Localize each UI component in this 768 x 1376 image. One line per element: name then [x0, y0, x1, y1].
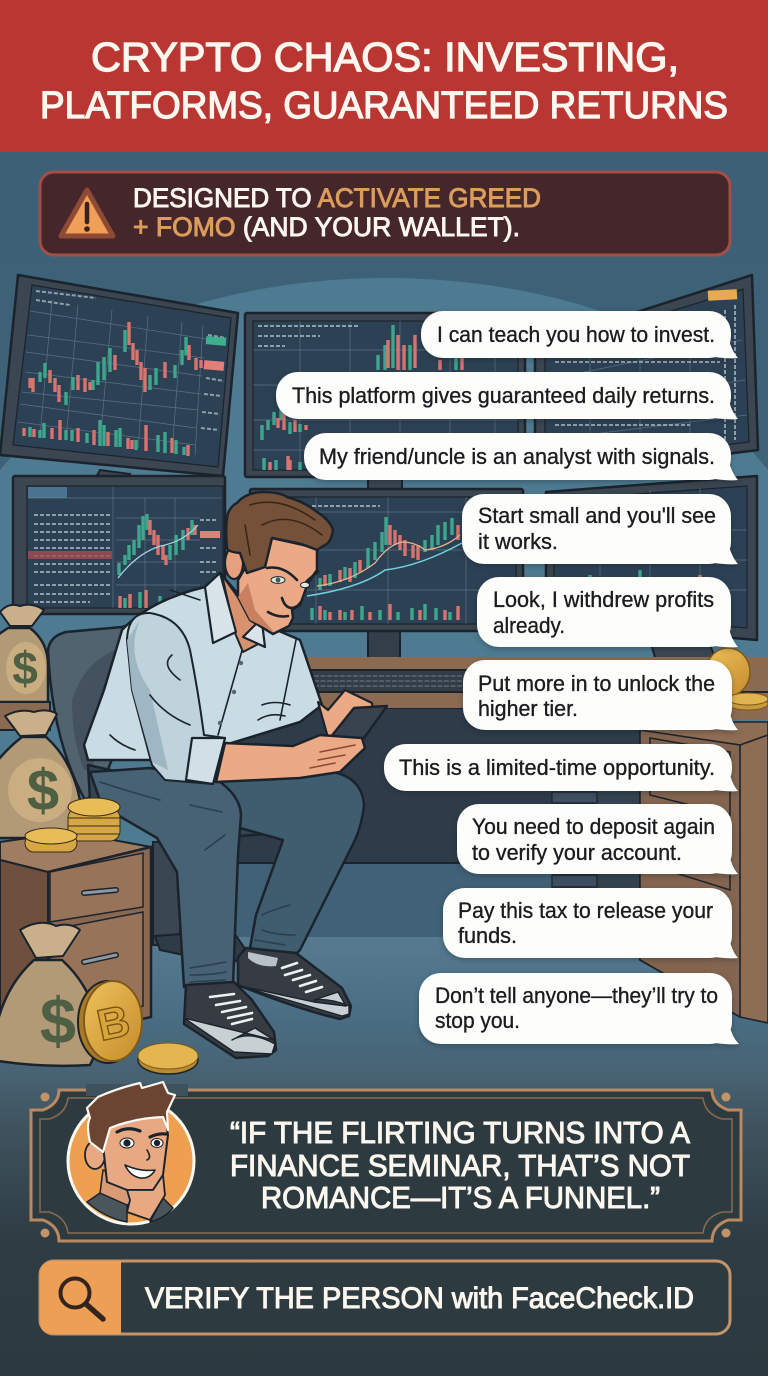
- verify text: VERIFY THE PERSON with FaceCheck.ID: [145, 1282, 694, 1315]
- portrait brows: [117, 1129, 166, 1137]
- bubble 6: higher tier.: [478, 696, 578, 721]
- bubble 8: [457, 804, 738, 874]
- far hand: [318, 690, 374, 745]
- money bag: middle: [0, 710, 80, 838]
- portrait hand: [127, 1175, 165, 1220]
- far shoe: [238, 948, 351, 1019]
- monitor: lower centre: [250, 489, 523, 668]
- drawers: right: [640, 648, 768, 1023]
- speech bubbles: [276, 311, 739, 1044]
- bubble 5: already.: [493, 613, 565, 638]
- man: [84, 492, 387, 1058]
- warning panel: [40, 172, 730, 255]
- bubble 3: My friend/uncle is an analyst with signals.: [319, 444, 715, 469]
- bubble 9: Pay this tax to release your: [458, 898, 713, 923]
- hair: [226, 492, 333, 573]
- ear: [225, 547, 243, 579]
- bubble 8: to verify your account.: [472, 840, 682, 865]
- portrait shirt: [87, 1193, 173, 1222]
- monitor: lower right: [546, 476, 757, 675]
- portrait ear: [85, 1141, 105, 1169]
- money bag: bottom: [0, 923, 102, 1066]
- monitor: top centre: [245, 313, 525, 494]
- quote panel: FINANCE SEMINAR, THAT’S NOT: [230, 1148, 690, 1183]
- background dome: [0, 278, 768, 863]
- coin: right: [706, 648, 750, 696]
- title line 2: PLATFORMS, GUARANTEED RETURNS: [40, 85, 728, 127]
- money bag: top: $: [12, 642, 38, 694]
- face: [238, 538, 317, 634]
- shirt: [84, 573, 322, 770]
- bubble 7: This is a limited-time opportunity.: [399, 755, 715, 780]
- background wall: [0, 150, 768, 940]
- drawer handles: [84, 890, 116, 962]
- coin stack: right: [728, 693, 768, 710]
- money bag: middle: $: [27, 758, 59, 823]
- footer background: [0, 1076, 768, 1376]
- coin stack: small: [25, 828, 77, 852]
- wall strip below desk: [0, 863, 768, 938]
- portrait: [68, 1082, 194, 1224]
- monitor: lower left: [13, 476, 225, 614]
- shirt buttons: [218, 661, 243, 725]
- coin stack: large: [68, 798, 120, 841]
- far leg: [220, 772, 364, 958]
- bubble 4: Start small and you'll see: [478, 503, 716, 528]
- bubble 2: [276, 372, 738, 419]
- money bag: bottom: $: [40, 984, 76, 1057]
- bubble 3: [304, 433, 738, 480]
- collar: [205, 573, 236, 643]
- bitcoin coin: B: [93, 996, 134, 1051]
- quote text: “IF THE FLIRTING TURNS INTO A: [230, 1115, 690, 1150]
- monitor: top right: [535, 275, 758, 478]
- portrait hair: [87, 1082, 175, 1152]
- bubble 1: I can teach you how to invest.: [437, 322, 715, 347]
- icon: warning triangle: [61, 190, 113, 236]
- portrait eyes: [120, 1138, 163, 1148]
- bubble 6: [463, 660, 738, 730]
- near leg: [90, 768, 241, 987]
- eyes: [271, 577, 285, 583]
- phone: [330, 706, 387, 738]
- bitcoin coin: [78, 981, 142, 1063]
- bubble 10: stop you.: [435, 1008, 520, 1033]
- bubble 4: it works.: [478, 529, 558, 554]
- portrait smile: [125, 1165, 155, 1178]
- title banner: [0, 0, 768, 152]
- desk ledge: left: [0, 702, 50, 730]
- bubble 7: [384, 744, 738, 791]
- bubble 4: [462, 494, 738, 564]
- keyboard: [309, 670, 474, 692]
- portrait face: [103, 1116, 168, 1190]
- bubble 9: [443, 888, 738, 958]
- money bag: top: [0, 605, 48, 702]
- bubble 10: [419, 973, 739, 1044]
- desk: [225, 657, 768, 890]
- quote panel: ROMANCE—IT’S A FUNNEL.”: [261, 1180, 660, 1215]
- under-desk shadow: [225, 709, 640, 863]
- bubble 8: You need to deposit again: [472, 814, 715, 839]
- floor: [0, 937, 768, 1077]
- rolled cuff: [186, 738, 225, 784]
- chair: [48, 610, 345, 965]
- quote panel: [31, 1082, 741, 1241]
- portrait neck: [100, 1170, 150, 1205]
- neck: [222, 575, 262, 652]
- bubble 5: [477, 577, 738, 647]
- flat coin: [138, 1043, 198, 1074]
- bubble 1: [421, 311, 738, 358]
- bubble 9: funds.: [458, 923, 517, 948]
- near shoe: [184, 982, 276, 1058]
- bubble 5: Look, I withdrew profits: [493, 587, 714, 612]
- bubble 2: This platform gives guaranteed daily returns.: [292, 383, 715, 408]
- monitor: top left: [0, 275, 238, 490]
- title line 1: CRYPTO CHAOS: INVESTING,: [91, 34, 679, 80]
- drawers: left: [0, 832, 151, 1040]
- icon: magnifying glass: [60, 1278, 103, 1319]
- sleeve: [127, 613, 225, 784]
- warning panel: + FOMO (AND YOUR WALLET).: [133, 212, 520, 242]
- bubble 6: Put more in to unlock the: [478, 671, 715, 696]
- forearm and hand: [216, 735, 365, 782]
- verify bar: [40, 1261, 730, 1334]
- warning text: DESIGNED TO ACTIVATE GREED: [133, 183, 541, 213]
- bubble 10: Don’t tell anyone—they’ll try to: [435, 983, 718, 1008]
